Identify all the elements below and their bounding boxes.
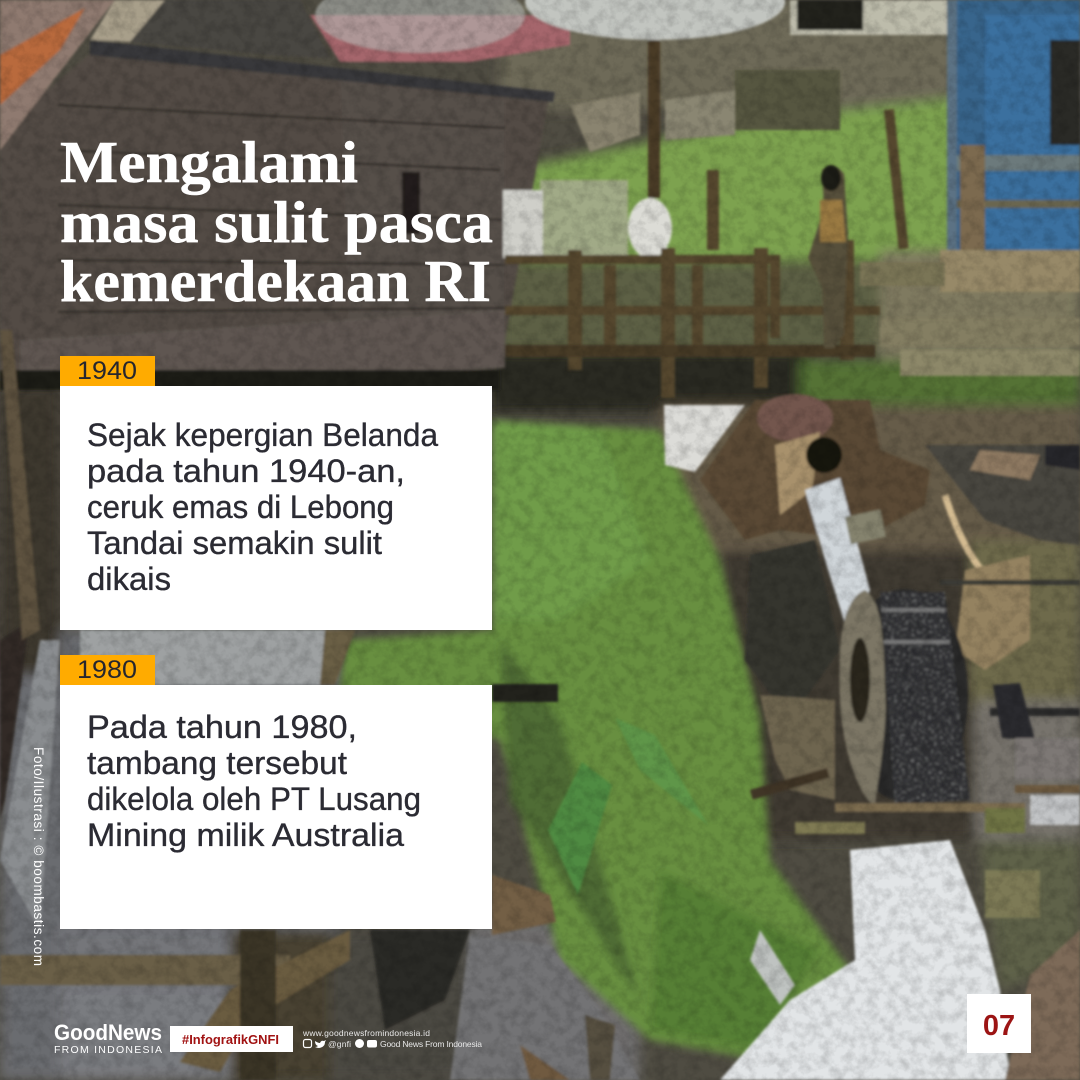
title: kemerdekaan RI bbox=[60, 248, 491, 314]
upper buildings and steps behind bbox=[790, 0, 950, 35]
social links: www.goodnewsfromindonesia.id bbox=[302, 1028, 430, 1038]
hut bbox=[0, 45, 550, 380]
water cascade bbox=[805, 478, 870, 640]
social links: @gnfi bbox=[328, 1039, 351, 1049]
satellite dishes bbox=[315, 0, 525, 53]
social links: Good News From Indonesia bbox=[380, 1039, 482, 1049]
water wheel bbox=[839, 589, 975, 810]
wooden fence bbox=[505, 109, 909, 398]
panel: 1940 text: ceruk emas di Lebong bbox=[87, 489, 394, 525]
panel: 1980 text: dikelola oleh PT Lusang bbox=[87, 781, 421, 817]
blue house bbox=[947, 0, 1080, 255]
year tab 1940: 1940 bbox=[77, 357, 137, 385]
logo: GoodNews From Indonesia: FROM INDONESIA bbox=[54, 1044, 162, 1056]
left waterfall and timber bbox=[0, 640, 60, 930]
icon: twitter bbox=[315, 1040, 326, 1048]
panel: 1940 text: pada tahun 1940-an, bbox=[87, 453, 405, 489]
icon: youtube bbox=[367, 1040, 377, 1048]
icon: instagram bbox=[304, 1040, 312, 1048]
hashtag box bbox=[170, 1026, 293, 1052]
social links bbox=[302, 1028, 482, 1049]
person bbox=[808, 166, 848, 348]
title: masa sulit pasca bbox=[60, 189, 493, 255]
page number bbox=[967, 994, 1031, 1053]
panel: 1980 text: Mining milik Australia bbox=[87, 817, 404, 853]
page number: 07 bbox=[983, 1010, 1015, 1042]
white water bottom bbox=[720, 840, 1010, 1080]
hashtag box: #InfografikGNFI bbox=[182, 1032, 279, 1047]
rusty roof bbox=[0, 0, 115, 150]
logo: GoodNews From Indonesia bbox=[54, 1020, 162, 1056]
panel: 1940 text: Sejak kepergian Belanda bbox=[87, 417, 438, 453]
fern leaves bbox=[548, 762, 612, 895]
icon: facebook bbox=[355, 1039, 364, 1048]
panel: 1980 text bbox=[60, 685, 492, 929]
photo credit: Foto/Ilustrasi : © boombastis.com bbox=[31, 747, 46, 966]
debris heap bbox=[664, 405, 745, 472]
grass slope bbox=[340, 420, 850, 1060]
timber beams bbox=[835, 803, 1025, 812]
title bbox=[60, 129, 493, 314]
year tab 1940 bbox=[60, 356, 155, 386]
panel: 1940 text: dikais bbox=[87, 561, 171, 597]
panel: 1980 text: Pada tahun 1980, bbox=[87, 709, 357, 745]
generator pipes bbox=[990, 708, 1080, 716]
panel: 1980 text: tambang tersebut bbox=[87, 745, 347, 781]
panel: 1940 text: Tandai semakin sulit bbox=[87, 525, 382, 561]
panel: 1940 text bbox=[60, 386, 492, 630]
year tab 1980 bbox=[60, 655, 155, 685]
logo: GoodNews From Indonesia: GoodNews bbox=[54, 1020, 162, 1045]
year tab 1980: 1980 bbox=[77, 656, 137, 684]
title: Mengalami bbox=[60, 129, 358, 195]
stone steps bbox=[940, 250, 1080, 292]
